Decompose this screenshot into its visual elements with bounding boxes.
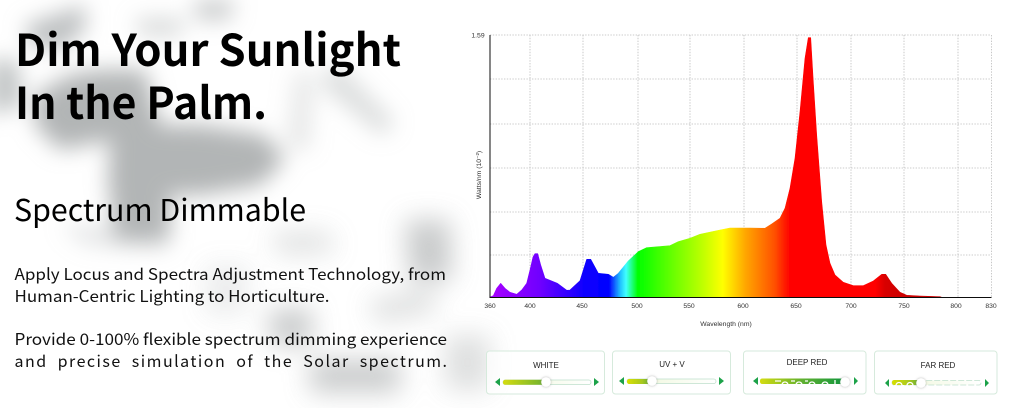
slider: far red	[874, 351, 997, 394]
slider: uv + v: UV + V	[659, 360, 685, 369]
y-axis title: Watts/nm (10⁻²)	[476, 151, 483, 199]
spectrum chart	[471, 32, 997, 328]
x-axis tick labels: 360	[484, 303, 496, 310]
slider: white	[486, 351, 604, 394]
x-axis tick labels: 750	[898, 303, 910, 310]
spectrum curve	[490, 38, 942, 297]
title: Dim Your Sunlight	[15, 15, 401, 79]
slider: far red: FAR RED	[921, 361, 956, 370]
slider: uv + v	[612, 351, 730, 394]
x-axis tick labels: 450	[576, 303, 588, 310]
slider: deep red	[744, 351, 866, 394]
x-axis tick labels: 650	[790, 303, 802, 310]
x-axis tick labels	[484, 303, 997, 310]
chart axes	[490, 35, 992, 298]
title	[15, 15, 401, 132]
x-axis tick labels: 830	[985, 303, 997, 310]
x-axis tick labels: 400	[524, 303, 536, 310]
background: blurred leaf shadows	[0, 0, 490, 392]
title: In the Palm.	[15, 68, 267, 132]
x-axis tick labels: 550	[683, 303, 695, 310]
x-axis tick labels: 600	[737, 303, 749, 310]
body text: paragraph 1: Apply Locus and Spectra Adjustment Technology, from	[14, 261, 446, 285]
y-axis max label: 1.59	[471, 32, 485, 40]
x-axis title: Wavelength (nm)	[700, 321, 752, 328]
body text: paragraph 2: Provide 0-100% flexible spectrum dimming experience	[14, 326, 447, 350]
subheading: Spectrum Dimmable	[14, 186, 306, 230]
x-axis tick labels: 700	[845, 303, 857, 310]
body text: paragraph 2	[14, 326, 447, 372]
body text: paragraph 1: Human-Centric Lighting to Horticulture.	[14, 283, 330, 307]
body text: paragraph 1	[14, 261, 446, 307]
x-axis tick labels: 500	[631, 303, 643, 310]
x-axis tick labels: 800	[950, 303, 962, 310]
slider: deep red: DEEP RED	[787, 358, 828, 367]
body text: paragraph 2: and precise simulation of the Solar spectrum.	[14, 348, 447, 372]
slider: white: WHITE	[533, 361, 559, 370]
chart grid	[490, 35, 992, 297]
